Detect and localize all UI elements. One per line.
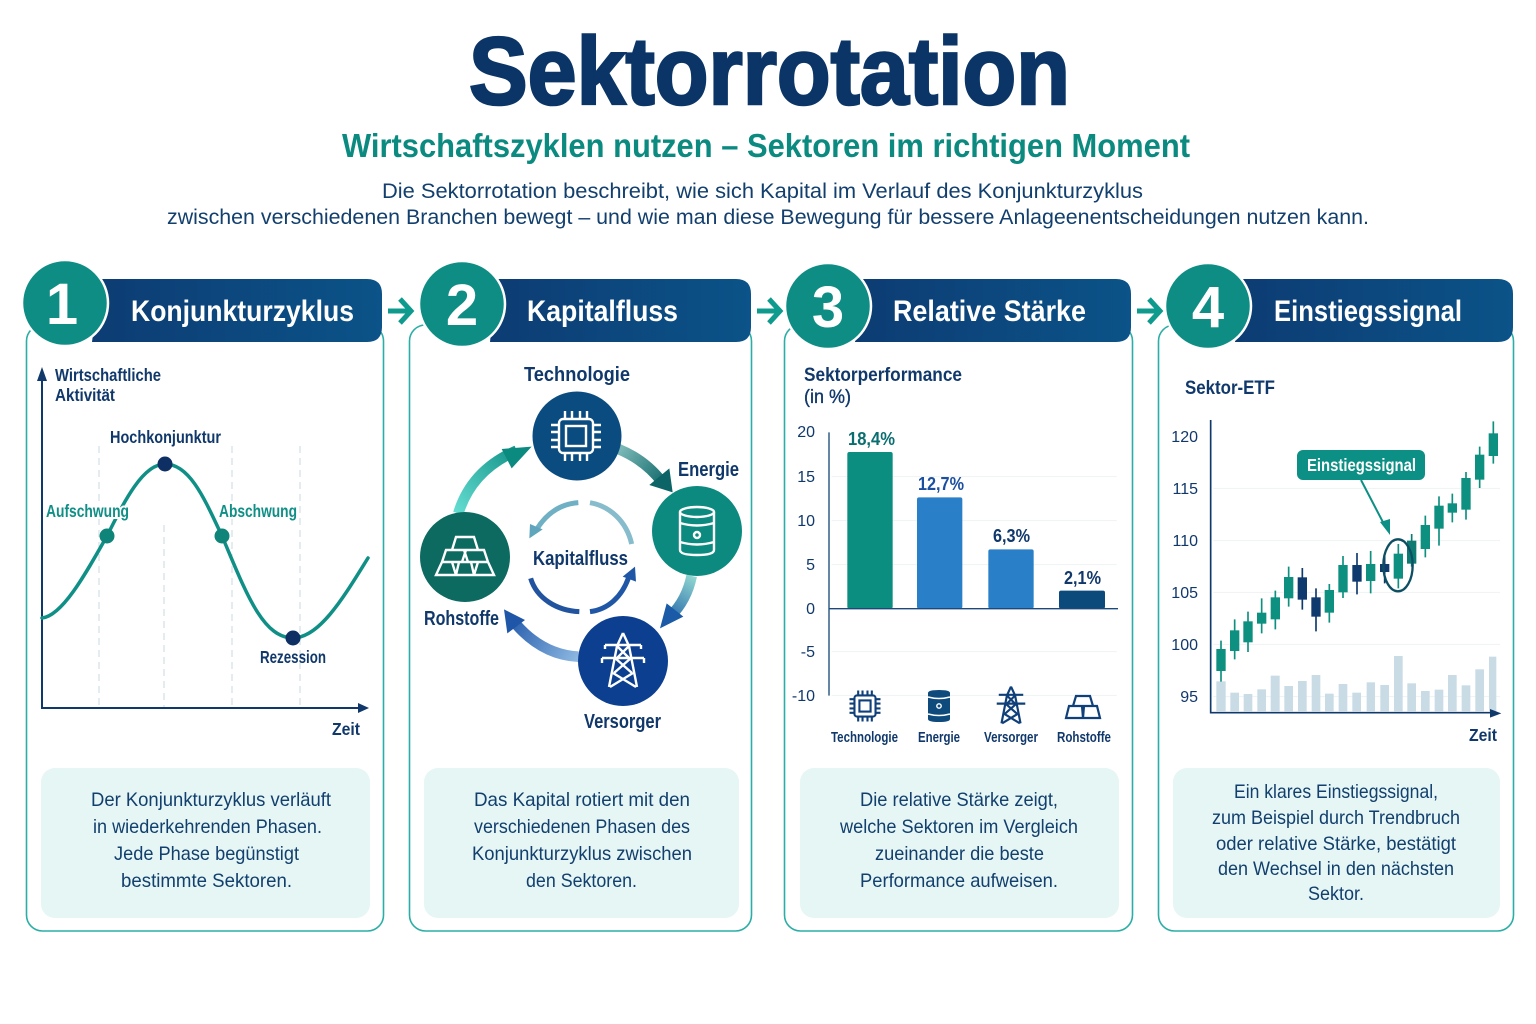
label: Hochkonjunktur: Hochkonjunktur: [110, 427, 221, 447]
category labels: [831, 730, 1111, 746]
panel border: [410, 325, 752, 931]
number badge: 4: [1192, 275, 1224, 340]
caption box: [1173, 768, 1500, 918]
number badge: 1: [46, 272, 78, 337]
category labels: Technologie: [831, 730, 898, 746]
caption box: [424, 768, 739, 918]
line chart: business cycle: [37, 367, 369, 713]
header label: Konjunkturzyklus: [131, 295, 354, 328]
icon: pylon small: [997, 687, 1025, 723]
chart title: Sektor-ETF: [1185, 378, 1275, 399]
node: Rohstoffe: [420, 512, 510, 602]
category labels: Energie: [918, 730, 960, 746]
header bar: [490, 279, 751, 342]
label: Energie: Energie: [678, 459, 739, 481]
header label: Einstiegssignal: [1274, 295, 1462, 328]
category labels: Rohstoffe: [1057, 730, 1111, 746]
icon: chip small: [850, 690, 880, 722]
arrow: step 2 to 3: [757, 299, 780, 323]
bar chart: 2,1%: [1064, 568, 1101, 588]
header bar: [92, 279, 382, 342]
candlestick chart: 95: [1180, 689, 1198, 706]
label: Abschwung: Abschwung: [219, 501, 297, 521]
caption box: verschiedenen Phasen des: [474, 816, 690, 838]
number badge: 3: [812, 275, 844, 340]
bar chart: 12,7%: [918, 474, 964, 494]
number badge: 2: [446, 273, 478, 338]
label: Versorger: Versorger: [584, 711, 661, 733]
panel border: [26, 325, 384, 931]
axis label: Zeit: Zeit: [332, 719, 360, 739]
axis label: Wirtschaftliche Aktivität: Wirtschaftliche: [55, 365, 161, 385]
panel 3: Relative Stärke: [784, 263, 1132, 931]
candlestick chart: 110: [1172, 533, 1198, 550]
caption box: bestimmte Sektoren.: [121, 870, 292, 892]
icon: power pylon: [602, 633, 644, 687]
intro text: zwischen verschiedenen Branchen bewegt – und wie man diese Bewegung für bessere Anlageenentscheidungen nutzen kann.: [167, 205, 1369, 229]
arrow: step 1 to 2: [388, 299, 411, 323]
caption box: in wiederkehrenden Phasen.: [93, 816, 322, 838]
node: Versorger: [578, 616, 668, 706]
chart title: Sektorperformance: [804, 365, 962, 386]
intro text: [167, 179, 1369, 229]
candlestick chart: Zeit: [1469, 725, 1497, 745]
icon: chip: [551, 411, 601, 461]
caption box: zueinander die beste: [875, 843, 1044, 865]
bar chart: 15: [797, 469, 815, 486]
chart title: (in %): [804, 387, 851, 408]
caption box: den Sektoren.: [526, 870, 637, 892]
panel border: [784, 325, 1132, 931]
panel border: [1158, 325, 1514, 931]
header bar: [1235, 279, 1513, 342]
caption box: Jede Phase begünstigt: [114, 843, 300, 865]
icon: gold bars: [436, 537, 494, 575]
icon: gold small: [1066, 696, 1100, 718]
number badge: [1165, 263, 1251, 349]
caption box: [41, 768, 370, 918]
caption box: [800, 768, 1119, 918]
caption box: oder relative Stärke, bestätigt: [1216, 833, 1457, 855]
label: Rezession: Rezession: [260, 647, 326, 667]
caption box: Sektor.: [1308, 883, 1364, 905]
number badge: [22, 260, 108, 346]
chart title: [804, 365, 962, 408]
bar chart: 20: [797, 424, 815, 441]
icon: barrel: [680, 507, 714, 555]
caption box: Performance aufweisen.: [860, 870, 1058, 892]
candlestick chart: [1171, 420, 1501, 745]
panel 1: Konjunkturzyklus: [22, 260, 384, 931]
label: Rohstoffe: Rohstoffe: [424, 608, 499, 630]
panel 4: Einstiegssignal: [1158, 263, 1514, 931]
title: Sektorrotation: [469, 18, 1070, 125]
label: Aufschwung: Aufschwung: [46, 501, 129, 521]
rotation arrows inner: [529, 503, 636, 612]
header label: Relative Stärke: [893, 295, 1086, 328]
caption box: welche Sektoren im Vergleich: [839, 816, 1078, 838]
candlestick chart: 100: [1171, 637, 1198, 654]
caption box: den Wechsel in den nächsten: [1218, 858, 1454, 880]
number badge: [785, 263, 871, 349]
bar chart: 0: [806, 601, 815, 618]
candlestick chart: 120: [1171, 429, 1198, 446]
intro text: Die Sektorrotation beschreibt, wie sich Kapital im Verlauf des Konjunkturzyklus: [382, 179, 1143, 203]
subtitle: Wirtschaftszyklen nutzen – Sektoren im richtigen Moment: [342, 127, 1190, 164]
caption box: Das Kapital rotiert mit den: [474, 789, 690, 811]
callout: Einstiegssignal: Einstiegssignal: [1307, 455, 1416, 475]
callout: Einstiegssignal: [1297, 450, 1425, 535]
caption box: zum Beispiel durch Trendbruch: [1212, 807, 1460, 829]
arrow: step 3 to 4: [1137, 299, 1160, 323]
bar chart: 18,4%: [848, 429, 895, 449]
caption box: Der Konjunkturzyklus verläuft: [91, 789, 332, 811]
number badge: [419, 261, 505, 347]
header label: Kapitalfluss: [527, 295, 678, 328]
bar chart: 6,3%: [993, 526, 1030, 546]
caption box: Ein klares Einstiegssignal,: [1234, 781, 1438, 803]
axis label: Wirtschaftliche Aktivität: Aktivität: [55, 385, 115, 405]
rotation arrows outer: [458, 447, 692, 657]
node: Technologie: [532, 392, 622, 480]
caption box: Die relative Stärke zeigt,: [860, 789, 1058, 811]
candlestick chart: 105: [1171, 585, 1198, 602]
panel 2: Kapitalfluss: [410, 261, 752, 931]
node: Energie: [652, 486, 742, 576]
axis label: Wirtschaftliche Aktivität: [55, 365, 161, 405]
bar chart: -5: [801, 644, 815, 661]
label: Kapitalfluss centre: Kapitalfluss: [533, 548, 628, 570]
caption box: Konjunkturzyklus zwischen: [472, 843, 692, 865]
category labels: Versorger: [984, 730, 1038, 746]
bar chart: 10: [797, 513, 815, 530]
bar chart: 5: [806, 557, 815, 574]
label: Technologie: Technologie: [524, 364, 630, 386]
icon: barrel small: [928, 690, 950, 722]
bar chart: -10: [792, 688, 815, 705]
bar chart: [792, 424, 1118, 705]
header bar: [855, 279, 1131, 342]
candlestick chart: 115: [1172, 481, 1198, 498]
